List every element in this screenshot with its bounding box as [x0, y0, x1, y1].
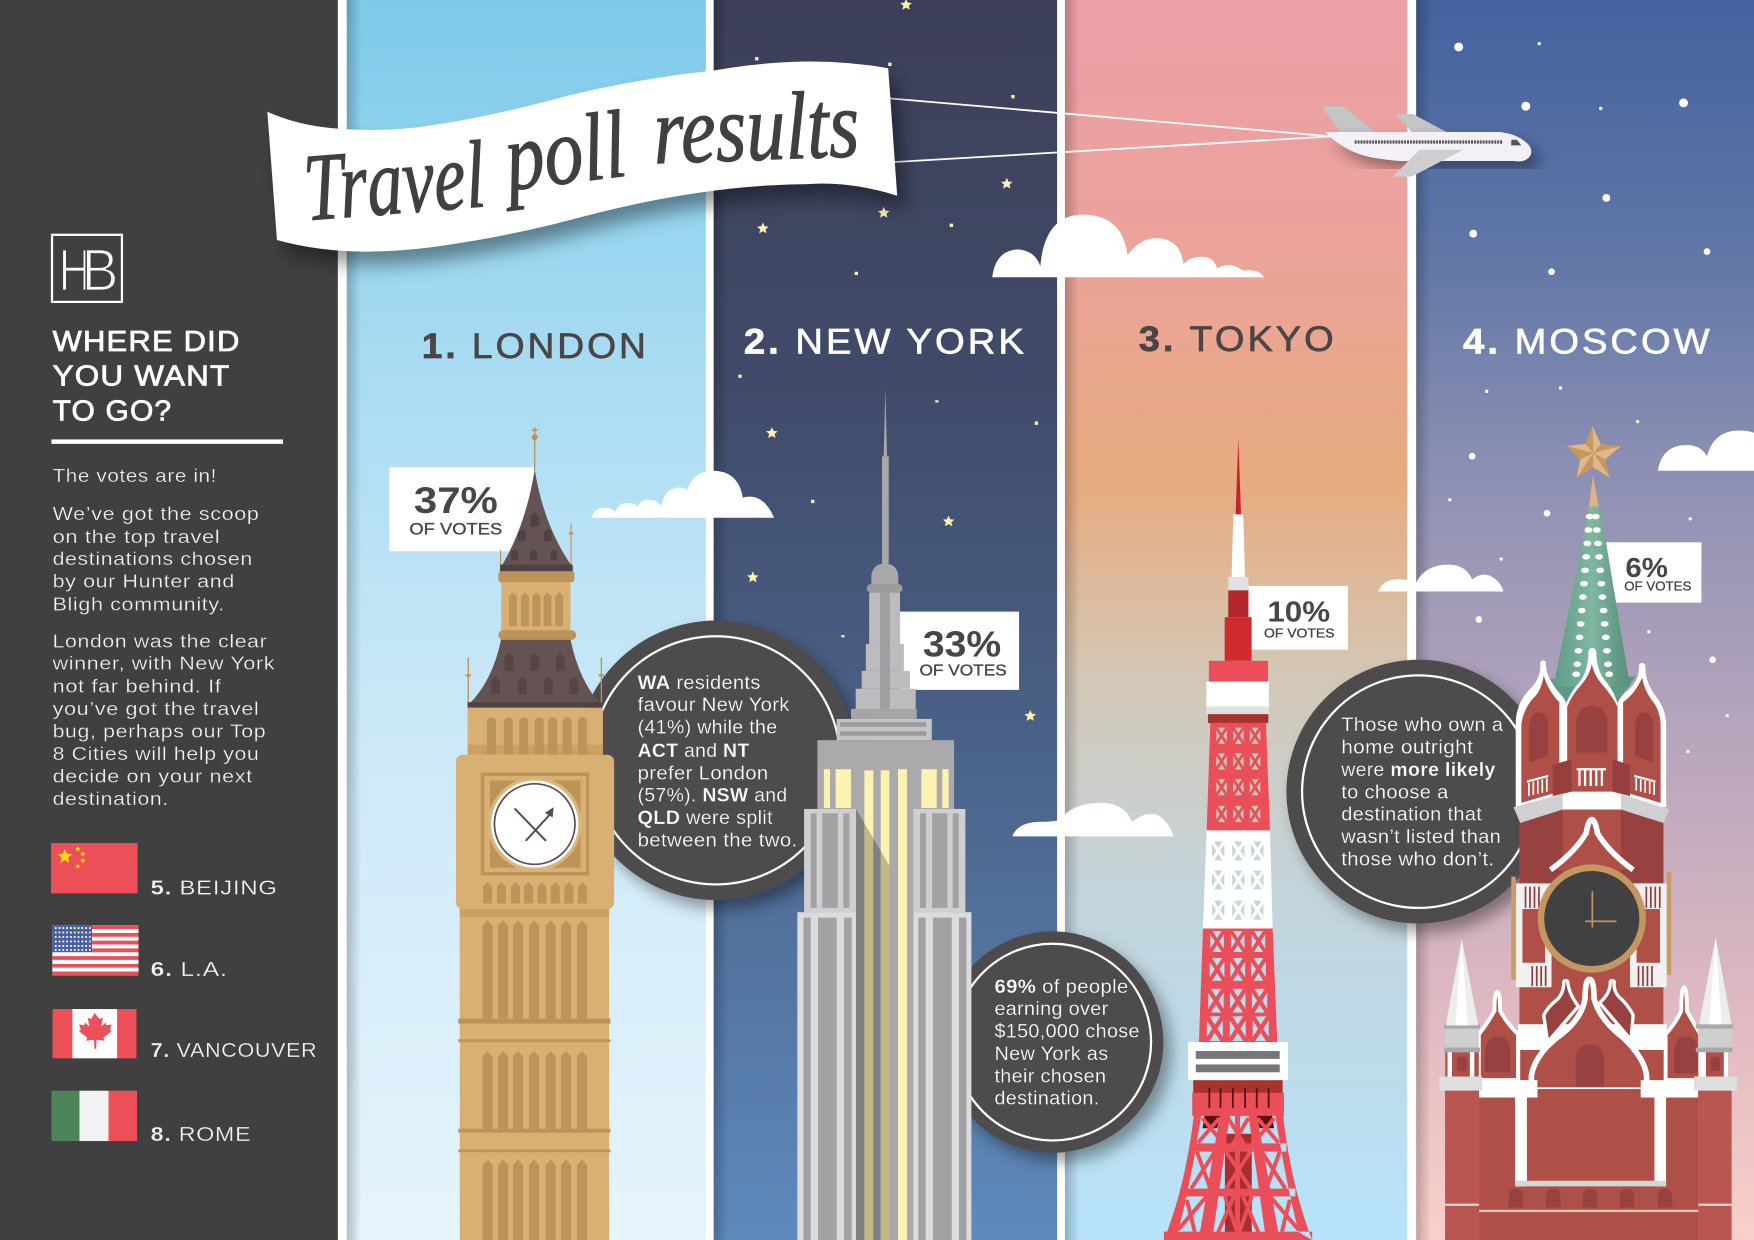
heading: 3. Tokyo: 3. TOKYO	[1139, 320, 1337, 359]
divider rule	[51, 439, 283, 444]
title: Travel poll results: Travel	[300, 120, 489, 241]
label: 8. Rome: 8. ROME	[151, 1124, 251, 1146]
panel: Tokyo column	[1065, 0, 1407, 1240]
text block: intro: We’ve got the scoop	[53, 503, 260, 524]
callout: 69% of people	[942, 931, 1163, 1153]
vote box: Tokyo 10%	[1248, 586, 1348, 650]
panel: London column	[347, 0, 706, 1240]
callout: home owners: home outright	[1341, 738, 1474, 759]
heading: 1. London: 1. LONDON	[422, 327, 649, 366]
callout: home owners: to choose a	[1341, 782, 1449, 803]
heading: where did you want to go: WHERE DID	[53, 326, 241, 358]
illustration: Tokyo Tower	[1164, 438, 1312, 1240]
cloud: Moscow top right	[1658, 430, 1754, 471]
callout: home owners	[1286, 660, 1550, 924]
vote box: Tokyo 10%: OF VOTES	[1264, 625, 1335, 640]
panel: Moscow column	[1416, 0, 1754, 1240]
callout: WA residents: prefer London	[638, 763, 768, 784]
callout: WA residents: QLD were split	[638, 808, 773, 829]
cloud: Tokyo top	[992, 215, 1264, 277]
heading: where did you want to go: YOU WANT	[53, 361, 230, 393]
flag: Canada	[53, 1009, 136, 1058]
callout: 69% of people: 69% of people	[994, 977, 1129, 998]
callout: WA residents: ACT and NT	[638, 741, 750, 762]
text block: intro: The votes are in!	[53, 465, 217, 486]
vote box: New York 33%: OF VOTES	[920, 662, 1007, 679]
cloud: Tokyo to Moscow	[1378, 565, 1503, 591]
text block: intro	[51, 465, 275, 809]
text block: intro: not far behind. If	[53, 676, 222, 697]
text block: intro: London was the clear	[53, 630, 267, 651]
vote box: London 37%: OF VOTES	[409, 520, 502, 538]
text block: intro: destinations chosen	[53, 548, 253, 569]
flag: Italy	[51, 1091, 137, 1141]
vote box: New York 33%	[899, 612, 1019, 690]
text block: intro: winner, with New York	[51, 653, 275, 674]
panel: left sidebar	[0, 0, 338, 1240]
heading: where did you want to go: TO GO?	[53, 395, 172, 427]
vote box: London 37%: 37%	[414, 480, 498, 521]
panel: New York column	[714, 0, 1057, 1240]
cloud: London	[592, 471, 774, 518]
vote box: Moscow 6%: OF VOTES	[1624, 578, 1691, 593]
callout: WA residents: (57%). NSW and	[638, 786, 788, 807]
callout: home owners: Those who own a	[1341, 715, 1504, 736]
callout: 69% of people: New York as	[994, 1044, 1109, 1065]
flag: China	[51, 843, 138, 893]
heading: where did you want to go	[53, 326, 241, 427]
tow lines: banner to plane	[889, 98, 1331, 162]
heading: 2. New York: 2. NEW YORK	[744, 322, 1027, 361]
logo: HB	[52, 235, 122, 304]
logo: HB: B	[82, 237, 119, 304]
callout: WA residents: between the two.	[638, 830, 798, 851]
callout: home owners: those who don’t.	[1341, 849, 1494, 870]
illustration: Empire State Building	[797, 388, 971, 1240]
text block: intro: on the top travel	[53, 526, 220, 547]
text block: intro: you’ve got the travel	[53, 698, 260, 719]
text block: intro: bug, perhaps our Top	[53, 720, 266, 741]
label: 6. L.A.: 6. L.A.	[151, 959, 228, 981]
vote box: New York 33%: 33%	[923, 624, 1001, 664]
callout: home owners: were more likely	[1340, 760, 1496, 781]
flag: USA	[52, 925, 138, 976]
heading: 4. Moscow: 4. MOSCOW	[1463, 322, 1713, 361]
callout: 69% of people: destination.	[994, 1089, 1100, 1110]
callout: WA residents: (41%) while the	[638, 717, 777, 738]
text block: intro: destination.	[53, 788, 169, 809]
title: Travel poll results: poll	[494, 90, 631, 212]
callout: home owners: wasn’t listed than	[1340, 827, 1501, 848]
banner	[267, 61, 897, 252]
callout: 69% of people: their chosen	[994, 1066, 1106, 1087]
illustration: Big Ben	[456, 427, 614, 1240]
vote box: London 37%	[389, 467, 535, 551]
logo: HB: H	[59, 237, 91, 304]
text block: intro: decide on your next	[53, 766, 253, 787]
text block: intro: Bligh community.	[53, 593, 225, 614]
cloud: New York to Tokyo	[1012, 803, 1173, 836]
illustration: airplane	[1322, 106, 1531, 177]
callout: home owners: destination that	[1341, 805, 1483, 826]
label: 7. Vancouver: 7. VANCOUVER	[151, 1040, 317, 1062]
callout: WA residents: favour New York	[638, 695, 790, 716]
text block: intro: by our Hunter and	[53, 571, 235, 592]
text block: intro: 8 Cities will help you	[53, 743, 260, 764]
label: 5. Beijing: 5. BEIJING	[151, 878, 278, 899]
vote box: Moscow 6%	[1604, 542, 1701, 603]
vote box: Tokyo 10%: 10%	[1267, 597, 1330, 629]
illustration: Spasskaya Tower, Kremlin	[1439, 426, 1737, 1240]
callout: WA residents: WA residents	[638, 673, 761, 694]
callout: WA residents	[576, 621, 856, 900]
stars: Moscow snow dots	[1448, 42, 1729, 753]
title: Travel poll results: results	[651, 70, 861, 184]
vote box: Moscow 6%: 6%	[1625, 552, 1668, 583]
title: Travel poll results	[300, 70, 861, 241]
callout: 69% of people: earning over	[994, 999, 1109, 1020]
callout: 69% of people: $150,000 chose	[994, 1022, 1140, 1043]
stars: New York night sky	[738, 0, 1038, 721]
